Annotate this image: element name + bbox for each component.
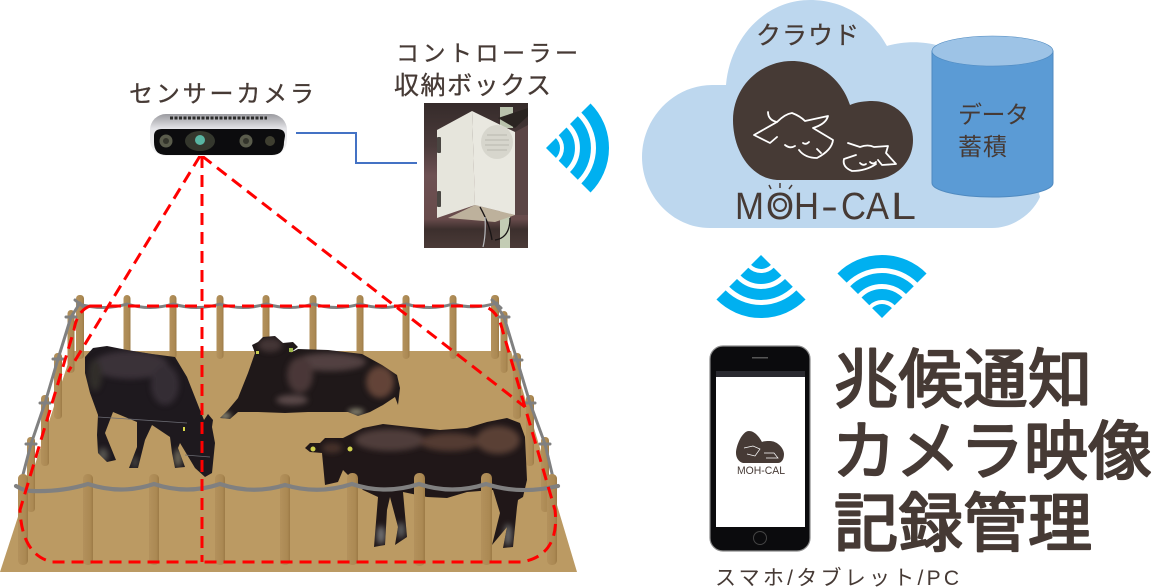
heading: features: 記録管理 [834,488,1092,560]
logo: MOH-CAL wordmark: L [891,186,916,228]
logo: MOH-CAL wordmark [735,183,916,228]
label: controller box: コントローラー [396,40,578,66]
icon: wifi from controller [546,108,602,188]
icon: smartphone: MOH-CAL [737,465,785,477]
logo: MOH-CAL wordmark: - [821,186,838,228]
front rope [16,484,558,491]
back and side ropes [20,300,555,486]
label: controller box [394,40,578,100]
logo: MOH-CAL wordmark: O [766,186,794,228]
label: sensor camera: センサーカメラ [129,81,314,108]
label: cloud: クラウド [756,22,859,50]
logo: MOH-CAL wordmark: M [735,186,764,228]
panel: cloud [642,0,1040,228]
camera field of view: red dashed lines [20,156,556,562]
label: controller box: 収納ボックス [394,72,551,100]
icon: smartphone [710,346,810,551]
logo: MOH-CAL wordmark: H [794,186,819,228]
ground [0,351,577,572]
photo: controller box [424,103,528,248]
back fence posts [76,295,499,359]
logo: MOH-CAL cloud with cows [733,61,913,180]
connection cable [296,133,417,163]
panel: data storage cylinder: 蓄積 [958,134,1007,161]
pen scene [0,295,577,572]
cow: standing [305,418,527,548]
heading: features: 兆候通知 [834,344,1092,416]
logo: MOH-CAL wordmark: A [866,186,890,228]
panel: data storage cylinder [932,36,1053,197]
logo: MOH-CAL wordmark: C [841,186,866,228]
side fence posts [27,310,549,512]
icon: wifi uplink [721,255,801,311]
icon: wifi downlink [842,262,922,318]
cow: grazing [85,346,215,477]
front fence posts [18,473,557,566]
heading: features [832,344,1152,560]
heading: features: カメラ映像 [832,416,1152,488]
panel: data storage cylinder: データ [958,102,1029,129]
cow: lying down [220,336,400,419]
icon: sensor camera [150,114,287,156]
